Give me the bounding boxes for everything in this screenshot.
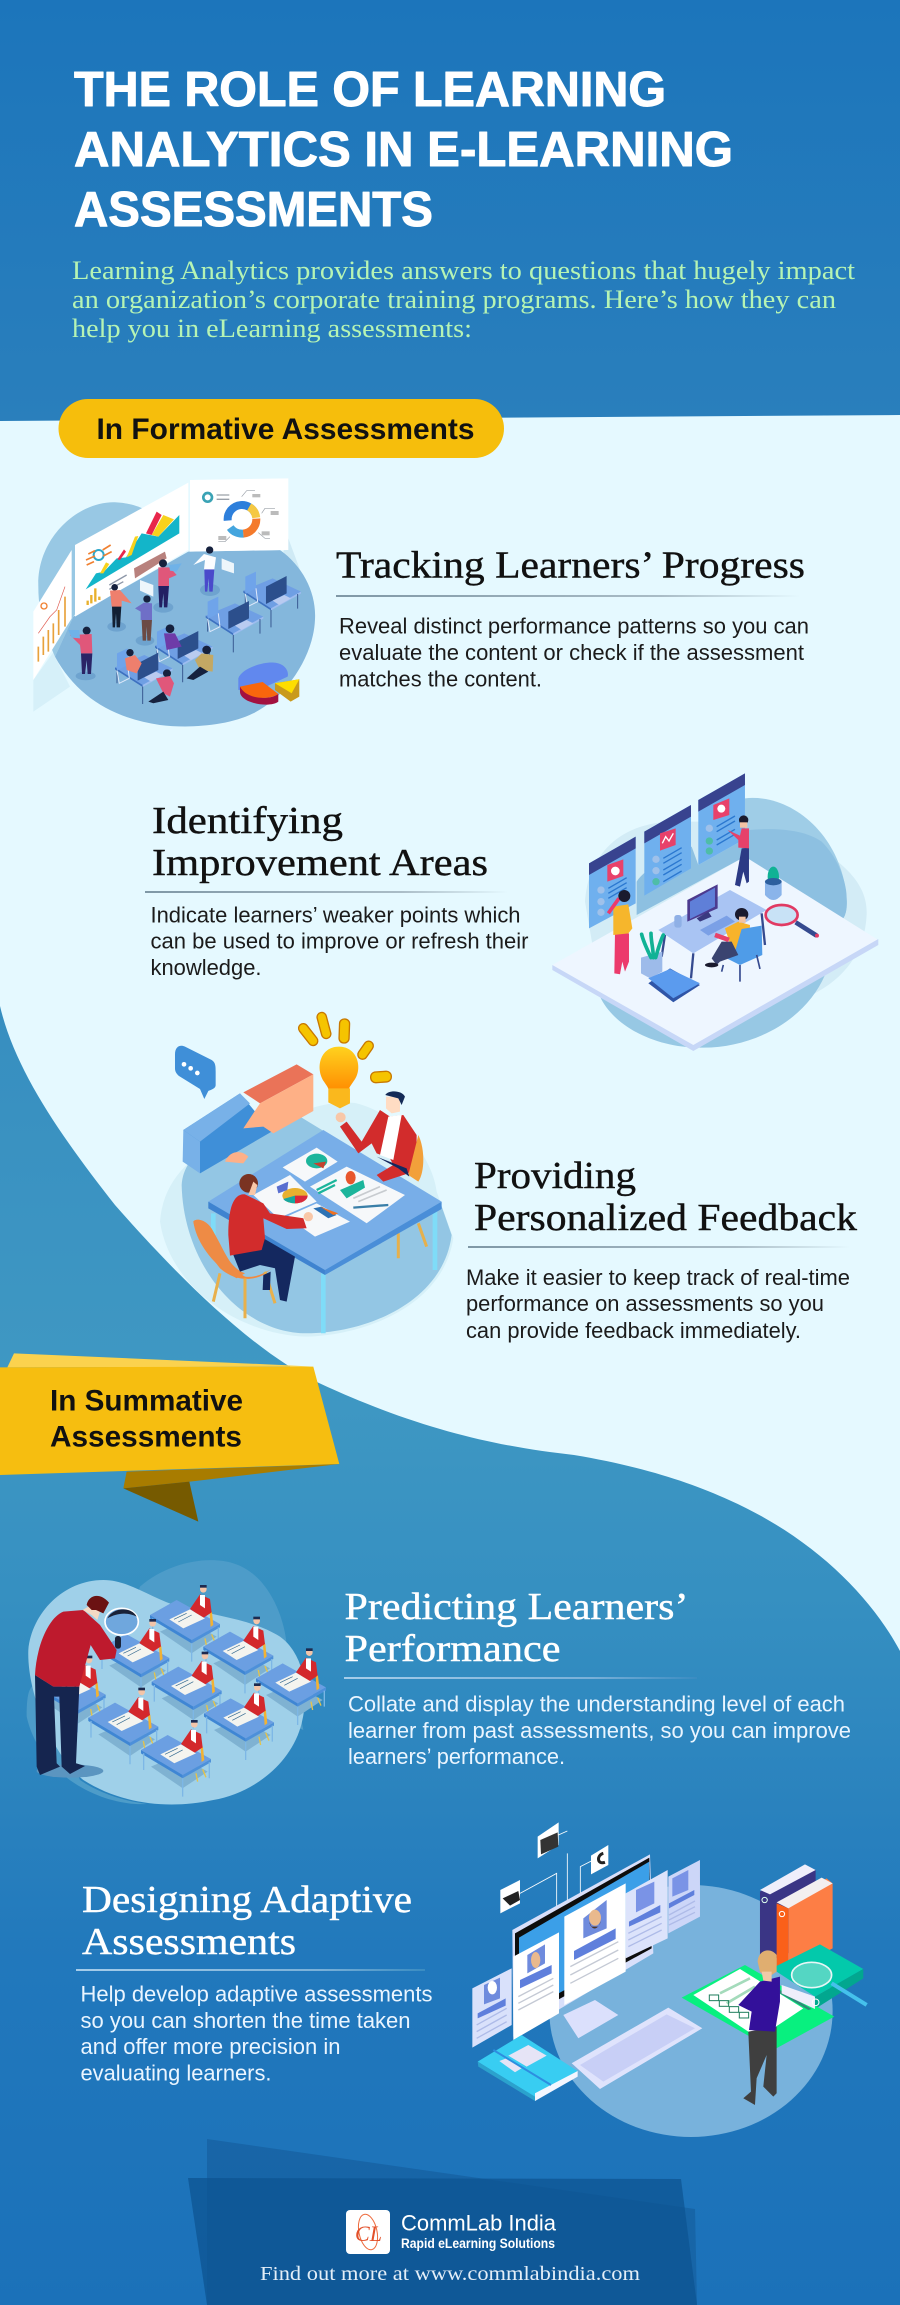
section banner: In Summative Assessments: [0, 1353, 339, 1522]
body: providing: [466, 1265, 850, 1343]
divider rule: [344, 1677, 697, 1679]
title: ANALYTICS IN E-LEARNING: [74, 123, 733, 177]
intro text: Learning Analytics provides answers to questions that hugely impact: [72, 255, 856, 285]
illustration: examiner and learners: [27, 1560, 326, 1804]
section pill: In Formative Assessments: In Formative Assessments: [96, 413, 474, 446]
body: identifying: can be used to improve or refresh their: [150, 928, 528, 954]
title: [74, 63, 733, 237]
logo: CommLab India: CommLab India: [401, 2210, 557, 2236]
illustration: adaptive assessment monitor: [472, 1822, 867, 2137]
footer link text: Find out more at www.commlabindia.com: [260, 2263, 640, 2285]
divider rule: [468, 1246, 850, 1248]
divider rule: [336, 595, 800, 597]
heading: Predicting Learners' Performance: [344, 1586, 688, 1670]
light section shape: [0, 415, 900, 1651]
body: designing: and offer more precision in: [80, 2034, 340, 2059]
section banner: In Summative Assessments: Assessments: [50, 1420, 242, 1454]
body: designing: evaluating learners.: [80, 2060, 272, 2086]
logo: CommLab India: [346, 2210, 557, 2254]
heading: Designing Adaptive Assessments: Assessments: [82, 1921, 296, 1963]
heading: Providing Personalized Feedback: Personalized Feedback: [474, 1197, 857, 1239]
body: identifying: Indicate learners’ weaker points which: [150, 902, 520, 928]
body: identifying: [150, 902, 528, 980]
body: predicting: Collate and display the understanding level of each: [348, 1692, 845, 1716]
heading: Predicting Learners' Performance: Performance: [344, 1628, 560, 1670]
footer backdrop: [188, 2139, 697, 2305]
body: tracking: [339, 614, 809, 692]
body: tracking: matches the content.: [339, 666, 542, 692]
intro text: help you in eLearning assessments:: [72, 313, 472, 343]
body: identifying: knowledge.: [150, 955, 262, 980]
body: providing: Make it easier to keep track of real-time: [466, 1265, 850, 1290]
body: providing: can provide feedback immediately.: [466, 1318, 801, 1343]
divider rule: [145, 891, 508, 893]
body: designing: so you can shorten the time taken: [80, 2008, 410, 2033]
illustration: personalized feedback: [160, 1011, 453, 1337]
section pill: In Formative Assessments: [58, 399, 504, 458]
heading: Designing Adaptive Assessments: Designing Adaptive: [82, 1879, 412, 1921]
heading: Designing Adaptive Assessments: [82, 1879, 412, 1963]
title: THE ROLE OF LEARNING: [74, 63, 666, 117]
section banner: In Summative Assessments: In Summative: [50, 1384, 243, 1418]
body: providing: performance on assessments so you: [466, 1291, 824, 1316]
heading: Providing Personalized Feedback: [474, 1155, 857, 1239]
body: designing: [80, 1982, 432, 2086]
logo: CommLab India: Rapid eLearning Solutions: [401, 2236, 555, 2251]
body: predicting: learners’ performance.: [348, 1744, 565, 1769]
intro text: an organization’s corporate training programs. Here’s how they can: [72, 284, 836, 314]
title: ASSESSMENTS: [74, 183, 433, 237]
body: predicting: [348, 1692, 851, 1769]
body: tracking: evaluate the content or check if the assessment: [339, 640, 804, 665]
heading: Providing Personalized Feedback: Providing: [474, 1155, 636, 1197]
heading: Identifying Improvement Areas: [152, 800, 488, 884]
intro text: [72, 255, 856, 343]
divider rule: [76, 1969, 425, 1971]
heading: Tracking Learners' Progress: Tracking Learners’ Progress: [336, 544, 805, 586]
body: designing: Help develop adaptive assessments: [80, 1982, 432, 2006]
illustration: analytics office: [33, 478, 315, 726]
body: tracking: Reveal distinct performance patterns so you can: [339, 614, 809, 638]
body: predicting: learner from past assessments, so you can improve: [348, 1718, 851, 1743]
heading: Identifying Improvement Areas: Identifying: [152, 800, 343, 842]
illustration: isometric workspace: [552, 773, 878, 1051]
logo: CommLab India: CL: [355, 2221, 382, 2246]
heading: Predicting Learners' Performance: Predicting Learners’: [344, 1586, 688, 1628]
heading: Identifying Improvement Areas: Improvement Areas: [152, 842, 488, 884]
